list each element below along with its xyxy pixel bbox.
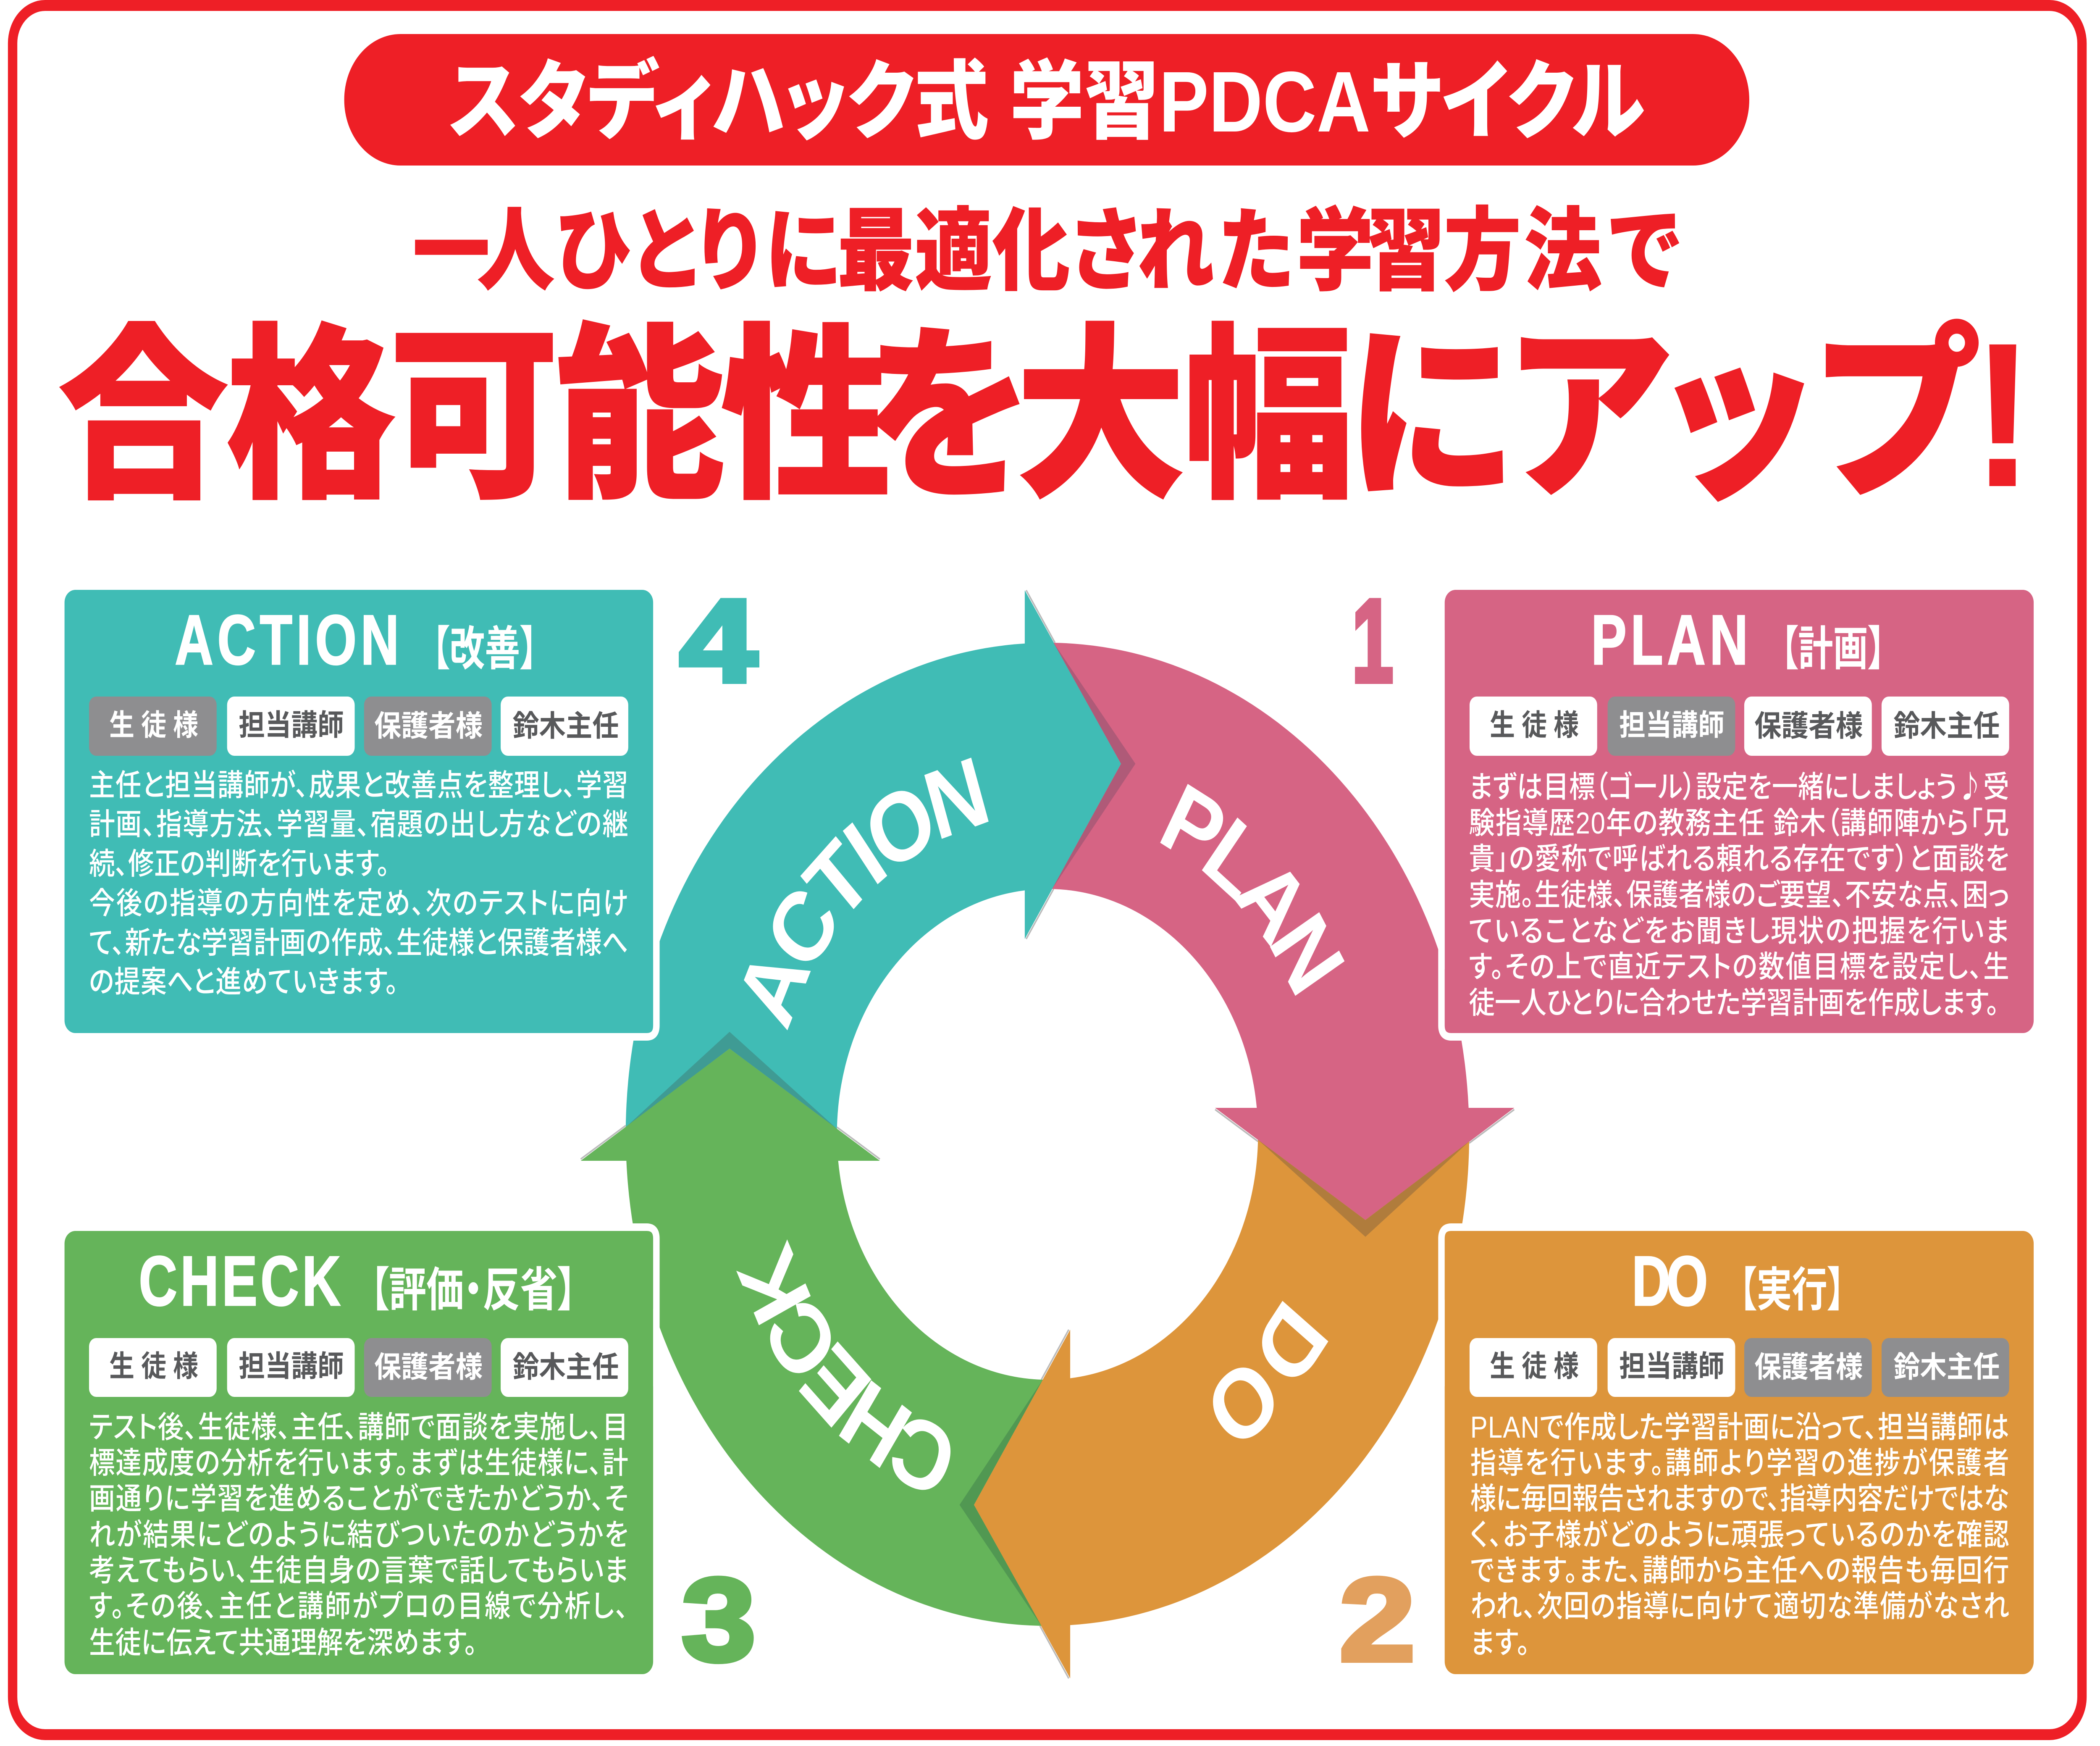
heading: DO: 【実行】 [1739,1252,1845,1320]
role tags: 担当講師 [239,1342,344,1385]
role tags: 生徒様 [109,701,198,744]
role tags [89,697,628,756]
number 4: 4 [680,576,758,707]
body text: ていることなどをお聞きし現状の把握を行いま [1469,915,2009,948]
role tags [1470,697,2009,756]
heading: ACTION: 【改善】 [432,611,538,679]
PDCA ring [581,590,1514,1678]
number 1: 1 [1352,576,1393,707]
role tags: 保護者様 [1754,1343,1863,1386]
arrow: PLAN [1052,643,1514,1220]
panel: CHECK [65,1227,656,1674]
body text: ます。 [1470,1626,1530,1660]
body text: まずは目標（ゴール）設定を一緒にしましょう♪受 [1469,763,2009,806]
heading: PLAN: PLAN [1591,600,1748,679]
role tags: 保護者様 [1754,702,1863,744]
heading: DO [1632,1241,1845,1320]
body text: て、新たな学習計画の作成、生徒様と保護者様へ [89,926,628,960]
title pill [344,34,1749,166]
role tags: 担当講師 [1619,701,1725,744]
role tags: 鈴木主任 [512,1343,619,1386]
heading: CHECK: 【評価・反省】 [370,1252,576,1320]
body text [89,769,628,999]
panel: PLAN [1441,590,2034,1037]
body text: 考えてもらい、生徒自身の言葉で話してもらいま [89,1554,628,1588]
body text: く、お子様がどのように頑張っているのかを確認 [1470,1518,2009,1552]
role tags: 鈴木主任 [1893,1343,2000,1386]
body text: 実施。生徒様、保護者様のご要望、不安な点、困っ [1469,878,2009,912]
body text: 様に毎回報告されますので、指導内容だけではな [1470,1482,2009,1516]
arrow: PLAN: PLAN [1129,745,1376,1029]
arrow: DO [974,1140,1469,1678]
heading: PLAN: 【計画】 [1781,611,1885,679]
role tags: 鈴木主任 [512,702,619,744]
heading: PLAN [1591,600,1885,679]
body text: PLANで作成した学習計画に沿って、担当講師は [1470,1411,2009,1444]
role tags [1470,1338,2009,1397]
body text: 主任と担当講師が、成果と改善点を整理し、学習 [89,769,628,802]
heading: CHECK [139,1241,576,1320]
role tags [89,1338,628,1397]
body text: す。その上で直近テストの数値目標を設定し、生 [1469,950,2009,984]
body text [1470,1411,2009,1660]
main headline: 合格可能性を大幅にアップ [58,265,1981,536]
role tags: 保護者様 [374,702,483,744]
role tags: 担当講師 [1619,1342,1725,1385]
body text: 標達成度の分析を行います。まずは生徒様に、計 [89,1446,628,1480]
body text: できます。また、講師から主任への報告も毎回行 [1470,1554,2009,1588]
body text [89,1411,628,1660]
body text: テスト後、生徒様、主任、講師で面談を実施し、目 [89,1411,628,1444]
heading: CHECK: CHECK [139,1241,341,1320]
heading: DO: DO [1632,1241,1708,1320]
arrow: ACTION [626,590,1121,1129]
heading: ACTION: ACTION [175,600,399,679]
role tags: 鈴木主任 [1893,702,2000,744]
role tags: 生徒様 [109,1342,198,1385]
role tags: 保護者様 [374,1343,483,1386]
main headline: ! [1972,300,2034,530]
panel: DO [1441,1227,2034,1674]
number 3: 3 [682,1554,756,1686]
body text: れが結果にどのように結びついたのかどうかを [89,1518,628,1552]
body text: 続、修正の判断を行います。 [89,847,390,881]
body text: 画通りに学習を進めることができたかどうか、そ [89,1482,628,1516]
body text: 計画、指導方法、学習量、宿題の出し方などの継 [89,808,628,841]
role tags: 生徒様 [1490,1342,1579,1385]
subheading: 一人ひとりに最適化された学習方法で [413,179,1683,308]
body text: 徒一人ひとりに合わせた学習計画を作成します。 [1469,986,1999,1020]
body text: す。その後、主任と講師がプロの目線で分析し、 [89,1590,628,1623]
role tags: 担当講師 [239,701,344,744]
arrow: CHECK [581,1049,1043,1626]
panel: ACTION [65,590,656,1037]
body text: 今後の指導の方向性を定め、次のテストに向け [89,887,628,920]
arrow: DO: DO [1176,1274,1352,1481]
role tags: 生徒様 [1490,701,1579,744]
body text [1469,763,2009,1020]
body text: 生徒に伝えて共通理解を深めます。 [89,1626,477,1660]
body text: 貴」の愛称で呼ばれる頼れる存在です）と面談を [1469,842,2009,876]
body text: の提案へと進めていきます。 [89,965,398,999]
arrow: CHECK: CHECK [696,1204,994,1546]
body text: われ、次回の指導に向けて適切な準備がなされ [1470,1590,2009,1623]
title pill: スタディハック式 学習PDCAサイクル [449,54,1645,150]
heading: ACTION [175,600,538,679]
arrow: ACTION: ACTION [689,699,1026,1070]
body text: 験指導歴20年の教務主任 鈴木（講師陣から「兄 [1469,807,2009,840]
body text: 指導を行います。講師より学習の進捗が保護者 [1470,1446,2009,1480]
number 2: 2 [1339,1554,1415,1686]
